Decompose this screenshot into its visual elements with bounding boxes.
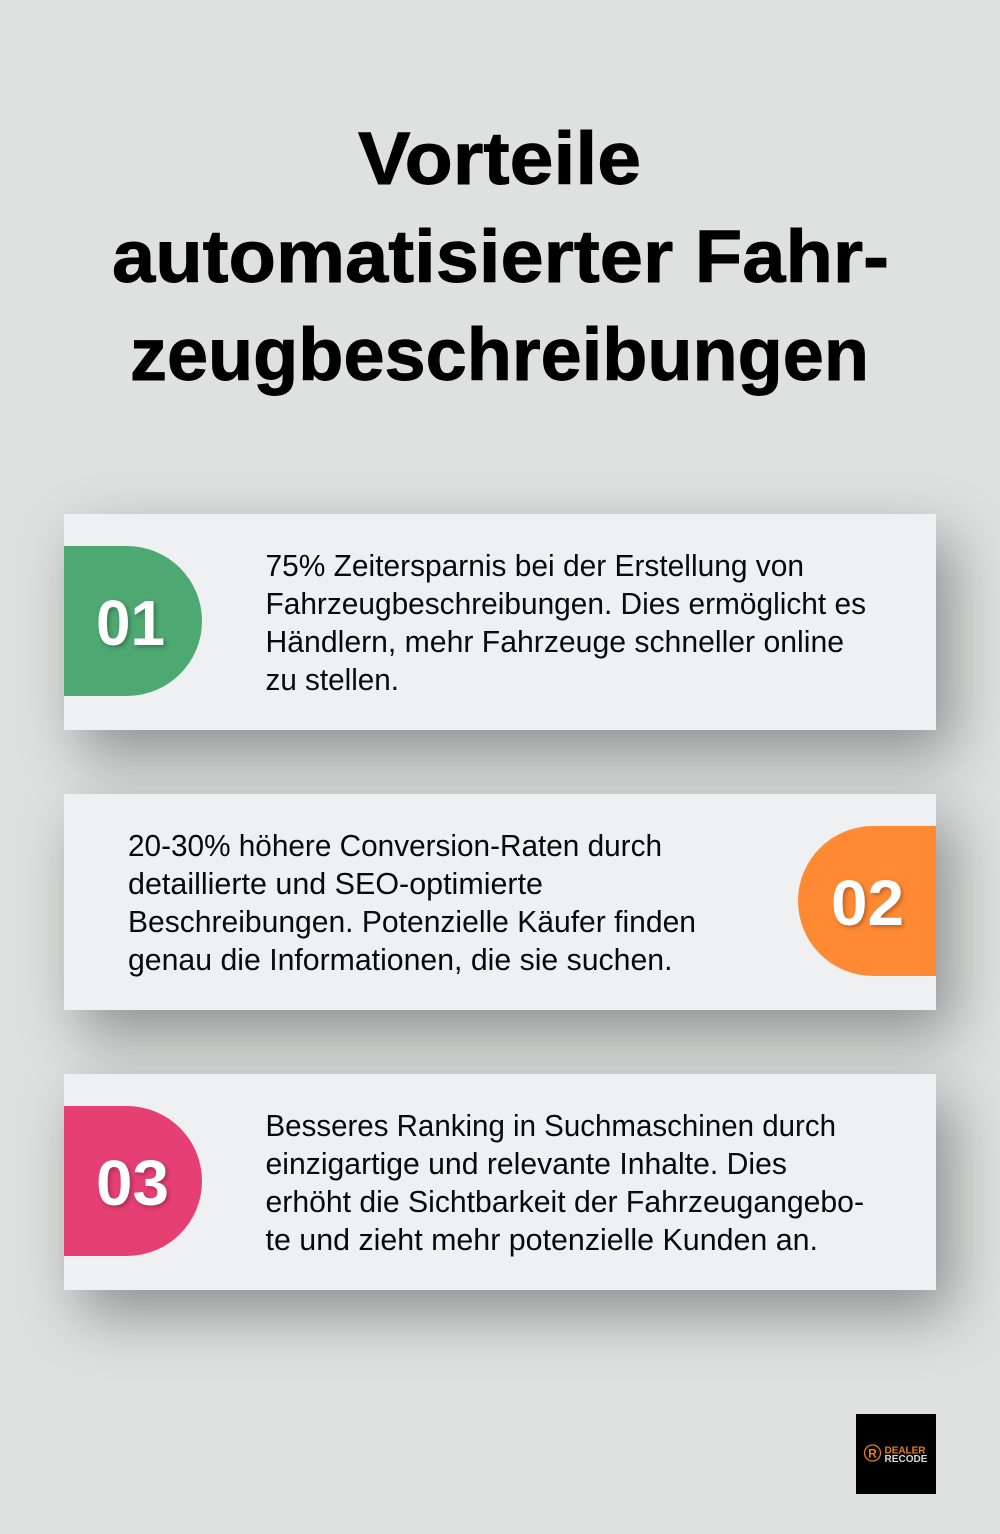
badge: 01: 01 (96, 587, 165, 659)
text: time savings: zu stellen. (266, 663, 399, 697)
icon: circled R: R (868, 1446, 877, 1460)
badge: 03: 03 (96, 1147, 169, 1219)
panel: benefit 02 (64, 794, 936, 1010)
text: time savings: Händlern, mehr Fahrzeuge schneller online (266, 625, 844, 659)
text: search ranking: einzigartige und relevante Inhalte. Dies (266, 1147, 787, 1181)
text: conversion rates: genau die Informationen, die sie suchen. (128, 943, 672, 977)
text: search ranking: Besseres Ranking in Suchmaschinen durch (266, 1109, 836, 1143)
panel: benefit 03 (64, 1074, 936, 1290)
title: zeugbeschreibungen (130, 313, 869, 396)
logo: Dealer Recode (856, 1414, 936, 1494)
title: automatisierter Fahr- (112, 215, 889, 298)
badge: 03 (64, 1106, 202, 1256)
text: time savings: 75% Zeitersparnis bei der Erstellung von (266, 549, 804, 583)
text: time savings (266, 549, 866, 697)
badge: 02 (798, 826, 936, 976)
badge: 02: 02 (831, 867, 904, 939)
text: conversion rates: 20-30% höhere Conversion-Raten durch (128, 829, 662, 863)
text: conversion rates: Beschreibungen. Potenzielle Käufer finden (128, 905, 696, 939)
text: search ranking: te und zieht mehr potenzielle Kunden an. (266, 1223, 818, 1257)
text: conversion rates (128, 829, 696, 977)
title: Vorteile (358, 117, 641, 200)
text: conversion rates: detaillierte und SEO-optimierte (128, 867, 543, 901)
badge: 01 (64, 546, 202, 696)
text: search ranking (266, 1109, 864, 1257)
logo: Dealer Recode: DEALER (884, 1444, 926, 1456)
text: search ranking: erhöht die Sichtbarkeit der Fahrzeugangebo- (266, 1185, 864, 1219)
title (112, 117, 889, 396)
text: time savings: Fahrzeugbeschreibungen. Dies ermöglicht es (266, 587, 866, 621)
logo: Dealer Recode: RECODE (884, 1453, 928, 1465)
panel: benefit 01 (64, 514, 936, 730)
